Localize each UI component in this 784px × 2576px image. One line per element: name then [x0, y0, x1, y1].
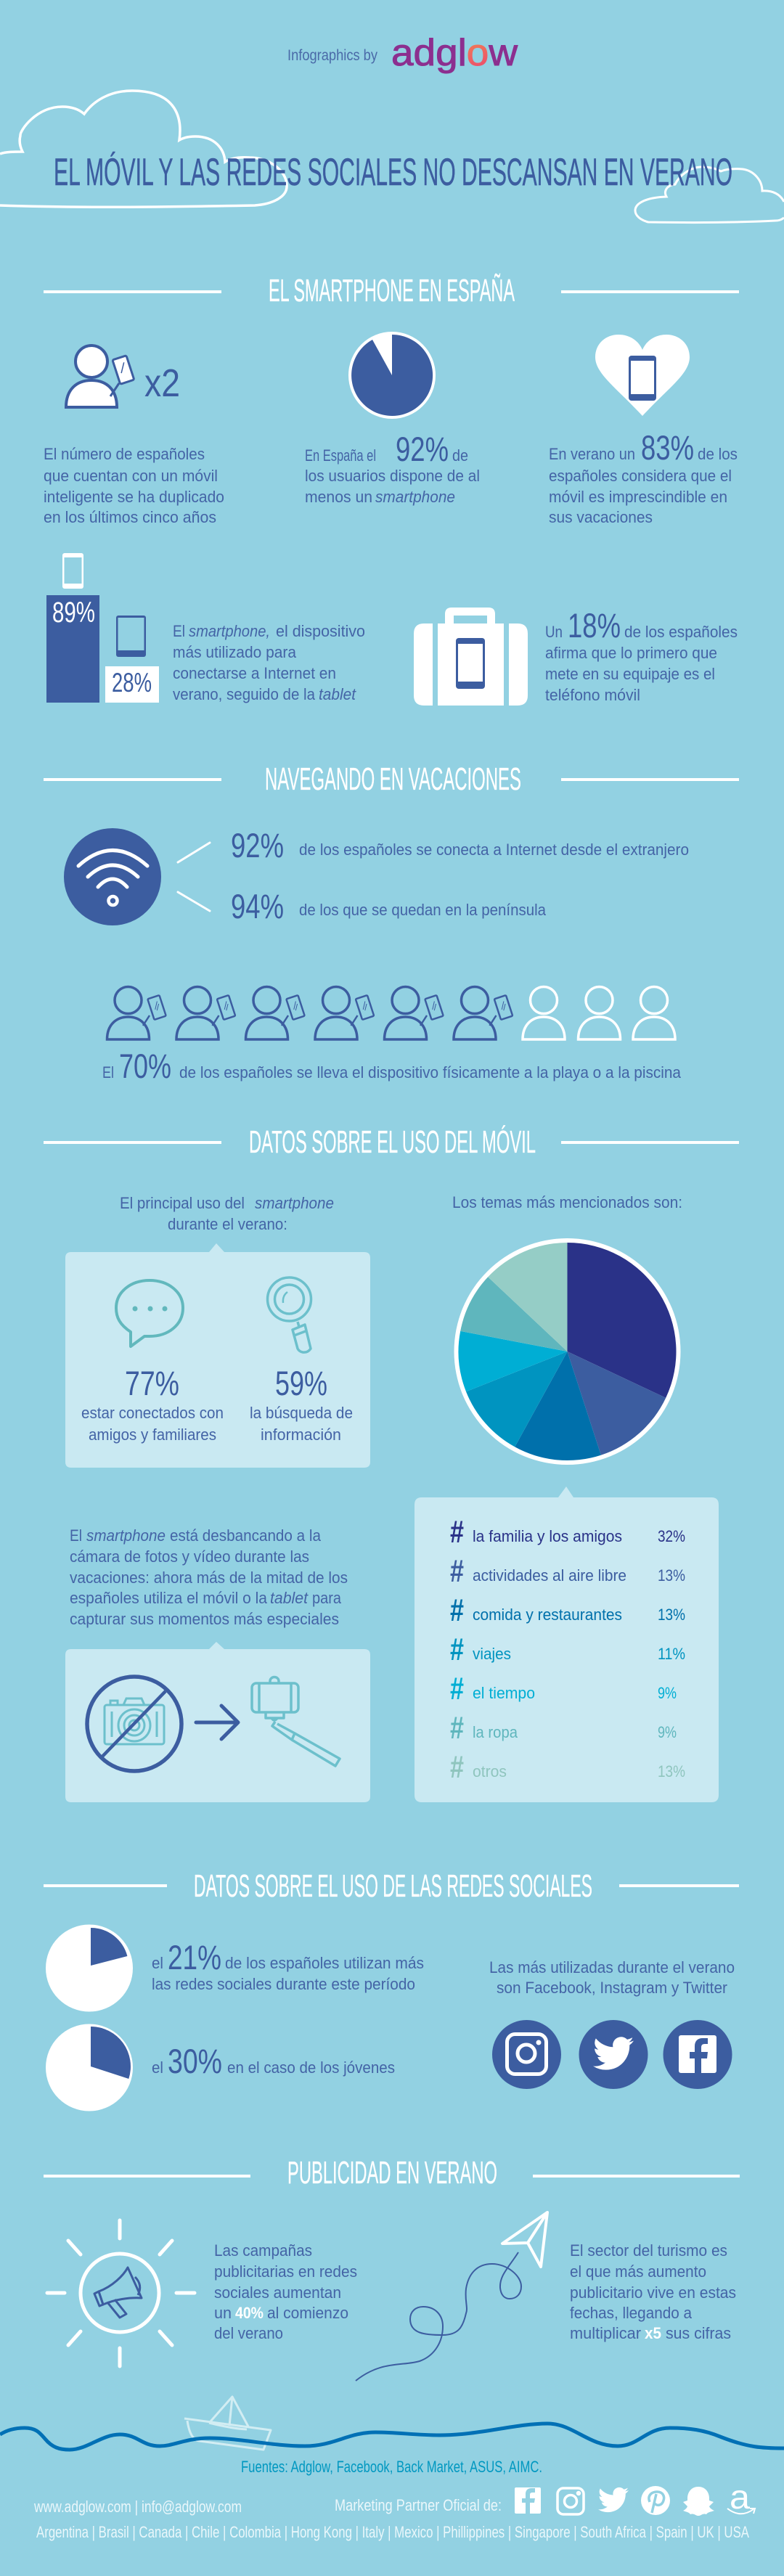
text: campaigns increase: publicitarias en redes	[214, 2262, 357, 2281]
stat: 30%	[152, 2042, 395, 2080]
row: food: 13%	[658, 1606, 685, 1624]
text: smartphone replacing camera: para	[312, 1589, 342, 1607]
stat: 94% peninsula: de los que se quedan en la península	[299, 901, 547, 919]
text: campaigns increase: al comienzo	[267, 2304, 348, 2322]
icon: pinterest	[641, 2486, 670, 2515]
text: tourism sector	[570, 2241, 736, 2342]
stat: 70% beach: El	[102, 1063, 114, 1081]
text: 18% suitcase: de los españoles	[624, 623, 738, 641]
text: most used device: el dispositivo	[276, 622, 365, 640]
row: clothes	[450, 1710, 677, 1746]
bar 89%	[46, 595, 99, 703]
description: que cuentan con un móvil	[44, 467, 218, 485]
description: smartphone	[375, 488, 455, 506]
stat: 92% abroad: 92%	[231, 826, 284, 864]
description: sus vacaciones	[549, 508, 653, 526]
section heading: navegando en vacaciones: NAVEGANDO EN VACACIONES	[265, 761, 521, 797]
description: menos un	[305, 488, 372, 506]
description: En España el	[305, 446, 376, 465]
stat: 77%: estar conectados con	[81, 1404, 224, 1422]
brand header	[287, 32, 518, 74]
x2 figure: x2	[144, 361, 180, 405]
description: de	[452, 446, 468, 465]
text: tourism sector: fechas, llegando a	[570, 2304, 693, 2322]
stat: 70% beach: 70%	[119, 1047, 171, 1085]
stat: 30%: el	[152, 2058, 163, 2077]
wave	[0, 2424, 784, 2450]
icon: amazon	[727, 2478, 755, 2516]
text: smartphone replacing camera	[70, 1526, 348, 1628]
text: campaigns increase	[214, 2241, 357, 2342]
contact: www.adglow.com | info@adglow.com	[33, 2498, 242, 2516]
text: campaigns increase: un	[214, 2304, 232, 2322]
description: españoles considera que el	[549, 467, 732, 485]
stat: 70% beach: de los españoles se lleva el dispositivo físicamente a la playa o a la piscina	[179, 1063, 682, 1081]
icon: prohibition sign	[87, 1677, 181, 1771]
bar 28%: 28%	[112, 668, 152, 698]
icon: chat bubble	[116, 1280, 183, 1346]
stat: 21%: las redes sociales durante este período	[152, 1975, 415, 1993]
section heading: el smartphone en España	[44, 272, 739, 308]
icon: camera	[105, 1698, 164, 1744]
icon: paper plane	[356, 2212, 547, 2381]
text: campaigns increase: sociales aumentan	[214, 2283, 341, 2302]
panel: topics list	[415, 1487, 719, 1802]
text: tourism sector: multiplicar	[570, 2324, 641, 2342]
text: campaigns increase: 40%	[235, 2304, 264, 2322]
row: outdoor: actividades al aire libre	[473, 1566, 626, 1585]
text: tourism sector: x5	[645, 2324, 661, 2342]
bar 89%: 89%	[52, 597, 95, 629]
marketing partner label: Marketing Partner Oficial de:	[335, 2496, 502, 2514]
text: 18% suitcase: teléfono móvil	[545, 686, 640, 704]
text: most used device: El	[173, 622, 185, 640]
description: inteligente se ha duplicado	[44, 488, 224, 506]
text: most used device	[173, 622, 365, 703]
row: travel	[450, 1632, 685, 1667]
row: outdoor	[450, 1553, 685, 1589]
icon: suitcase with phone	[414, 608, 528, 706]
text: principal use	[120, 1194, 334, 1233]
text: 18% suitcase: mete en su equipaje es el	[545, 665, 715, 683]
description: 83%	[641, 428, 694, 467]
row: travel: viajes	[473, 1645, 511, 1663]
text: smartphone replacing camera: está desbancando a la	[170, 1526, 322, 1545]
icon: selfie stick	[252, 1677, 340, 1766]
row: travel: #	[450, 1632, 464, 1667]
connector lines	[178, 843, 210, 911]
pie chart 30%	[46, 2024, 133, 2111]
icon: facebook	[515, 2487, 541, 2514]
row: outdoor: 13%	[658, 1566, 685, 1585]
text: most used networks: Las más utilizadas durante el verano	[489, 1958, 735, 1976]
bar chart: smartphone vs tablet	[46, 553, 159, 703]
text: 18% suitcase: Un	[545, 623, 563, 641]
panel: camera to selfie stick	[65, 1642, 370, 1802]
description	[549, 428, 738, 526]
icon: twitter	[579, 2020, 648, 2089]
text: 18% suitcase: afirma que lo primero que	[545, 644, 717, 662]
row: family: la familia y los amigos	[473, 1527, 622, 1545]
row: outdoor: #	[450, 1553, 464, 1589]
stat: 70% beach	[102, 1047, 682, 1085]
panel: main uses	[65, 1243, 370, 1468]
text: smartphone replacing camera: capturar sus momentos más especiales	[70, 1610, 339, 1628]
stat: 77%: 77%	[125, 1364, 179, 1402]
stat: 92% abroad	[231, 826, 689, 864]
credit text: Infographics by	[287, 47, 377, 64]
cloud left	[0, 91, 287, 207]
sources: Fuentes: Adglow, Facebook, Back Market, ASUS, AIMC.	[241, 2458, 542, 2476]
adglow logo: adglow	[391, 32, 518, 74]
text: 18% suitcase: 18%	[568, 606, 621, 645]
text: most used device: tablet	[319, 685, 356, 703]
section heading: el smartphone en España: EL SMARTPHONE EN ESPAÑA	[269, 272, 515, 308]
row: clothes: la ropa	[473, 1723, 518, 1741]
stat: 92% abroad: de los españoles se conecta a Internet desde el extranjero	[299, 841, 689, 859]
icon: person with phone	[66, 345, 134, 407]
icon: instagram	[492, 2020, 561, 2089]
icon: paper boat	[184, 2397, 271, 2450]
description: en los últimos cinco años	[44, 508, 216, 526]
text: most used device: verano, seguido de la	[173, 685, 316, 703]
row: weather: #	[450, 1671, 464, 1706]
arrow	[196, 1706, 238, 1739]
text: campaigns increase: Las campañas	[214, 2241, 312, 2260]
icon: smartphone	[62, 553, 83, 589]
text: most used device: smartphone,	[189, 622, 270, 640]
section heading: publicidad en verano	[44, 2155, 740, 2191]
text: tourism sector: el que más aumento	[570, 2262, 706, 2281]
row: food: #	[450, 1592, 464, 1628]
pie chart 21%	[46, 1925, 133, 2012]
stat: 59%	[250, 1364, 353, 1444]
text: most used networks	[489, 1958, 735, 1997]
row: other: 13%	[658, 1762, 685, 1780]
description: móvil es imprescindible en	[549, 488, 727, 506]
section heading: datos sobre el uso del móvil	[44, 1124, 739, 1160]
row: food: comida y restaurantes	[473, 1606, 622, 1624]
partner icons	[515, 2478, 755, 2516]
stat: 21%: de los españoles utilizan más	[225, 1954, 424, 1972]
section heading: publicidad en verano: PUBLICIDAD EN VERANO	[287, 2155, 497, 2191]
stat: 77%: amigos y familiares	[89, 1426, 216, 1444]
icon: magnifier	[267, 1277, 311, 1352]
icon: wifi	[64, 828, 161, 925]
description: 92%	[396, 430, 449, 468]
row: clothes: 9%	[658, 1723, 677, 1741]
stat: 30%: en el caso de los jóvenes	[227, 2058, 395, 2077]
stat: 83% essential	[549, 335, 738, 526]
description: de los	[698, 445, 738, 463]
icon: twitter	[598, 2487, 629, 2512]
text: smartphone replacing camera: cámara de fotos y vídeo durante las	[70, 1547, 309, 1566]
text: 18% suitcase	[545, 606, 738, 704]
icon: instagram	[558, 2488, 584, 2514]
text: smartphone replacing camera: smartphone	[86, 1526, 166, 1545]
section heading: datos sobre el uso del móvil: DATOS SOBRE EL USO DEL MÓVIL	[249, 1124, 536, 1160]
description: los usuarios dispone de al	[305, 467, 480, 485]
icon: heart with phone	[595, 335, 690, 416]
text: principal use: smartphone	[255, 1194, 334, 1212]
row: weather	[450, 1671, 677, 1706]
icon: amazon: a	[730, 2478, 750, 2516]
row: clothes: #	[450, 1710, 464, 1746]
description: En verano un	[549, 445, 635, 463]
row: other	[450, 1749, 685, 1785]
description	[44, 445, 224, 526]
row: weather: el tiempo	[473, 1684, 535, 1702]
stat: 30%: 30%	[168, 2042, 222, 2080]
stat: 92% have smartphone	[305, 332, 480, 506]
text: tourism sector: publicitario vive en estas	[570, 2283, 736, 2302]
stat: 21%: el	[152, 1954, 163, 1972]
text: tourism sector: El sector del turismo es	[570, 2241, 727, 2260]
text: most used device: más utilizado para	[173, 643, 297, 661]
text: smartphone replacing camera: vacaciones: ahora más de la mitad de los	[70, 1569, 348, 1587]
text: topics: Los temas más mencionados son:	[452, 1193, 682, 1211]
description: El número de españoles	[44, 445, 205, 463]
cloud right	[635, 167, 784, 223]
description	[305, 430, 480, 506]
pie chart 92%	[348, 332, 436, 419]
text: smartphone replacing camera: tablet	[270, 1589, 309, 1607]
text: principal use: durante el verano:	[168, 1215, 287, 1233]
icon: snapchat	[683, 2487, 714, 2516]
row: family	[450, 1514, 685, 1550]
text: principal use: El principal uso del	[120, 1194, 245, 1212]
stat: 59%: la búsqueda de	[250, 1404, 353, 1422]
text: campaigns increase: del verano	[214, 2324, 283, 2342]
pictogram: 70% of people	[107, 987, 675, 1039]
row: other: otros	[473, 1762, 507, 1780]
stat: x2 smartphone owners	[44, 345, 224, 526]
text: most used device: conectarse a Internet en	[173, 664, 336, 682]
row: family: 32%	[658, 1527, 685, 1545]
stat: 21%	[152, 1938, 424, 1993]
icon: megaphone with sun rays	[47, 2220, 195, 2366]
row: food	[450, 1592, 685, 1628]
icon: facebook	[663, 2020, 732, 2089]
icon: tablet	[116, 616, 146, 657]
stat: 59%: información	[261, 1426, 341, 1444]
bar 28%	[105, 666, 159, 703]
row: other: #	[450, 1749, 464, 1785]
stat: 21%: 21%	[168, 1938, 221, 1976]
stat: 94% peninsula: 94%	[231, 887, 284, 925]
row: family: #	[450, 1514, 464, 1550]
pie chart: topics	[454, 1238, 681, 1465]
row: travel: 11%	[658, 1645, 685, 1663]
text: smartphone replacing camera: españoles utiliza el móvil o la	[70, 1589, 268, 1607]
text: tourism sector: sus cifras	[666, 2324, 731, 2342]
stat: 94% peninsula	[231, 887, 547, 925]
stat: 77%	[81, 1364, 224, 1444]
text: smartphone replacing camera: El	[70, 1526, 82, 1545]
text: most used networks: son Facebook, Instagram y Twitter	[497, 1979, 727, 1997]
section heading: navegando en vacaciones	[44, 761, 739, 797]
row: weather: 9%	[658, 1684, 677, 1702]
stat: 59%: 59%	[275, 1364, 327, 1402]
